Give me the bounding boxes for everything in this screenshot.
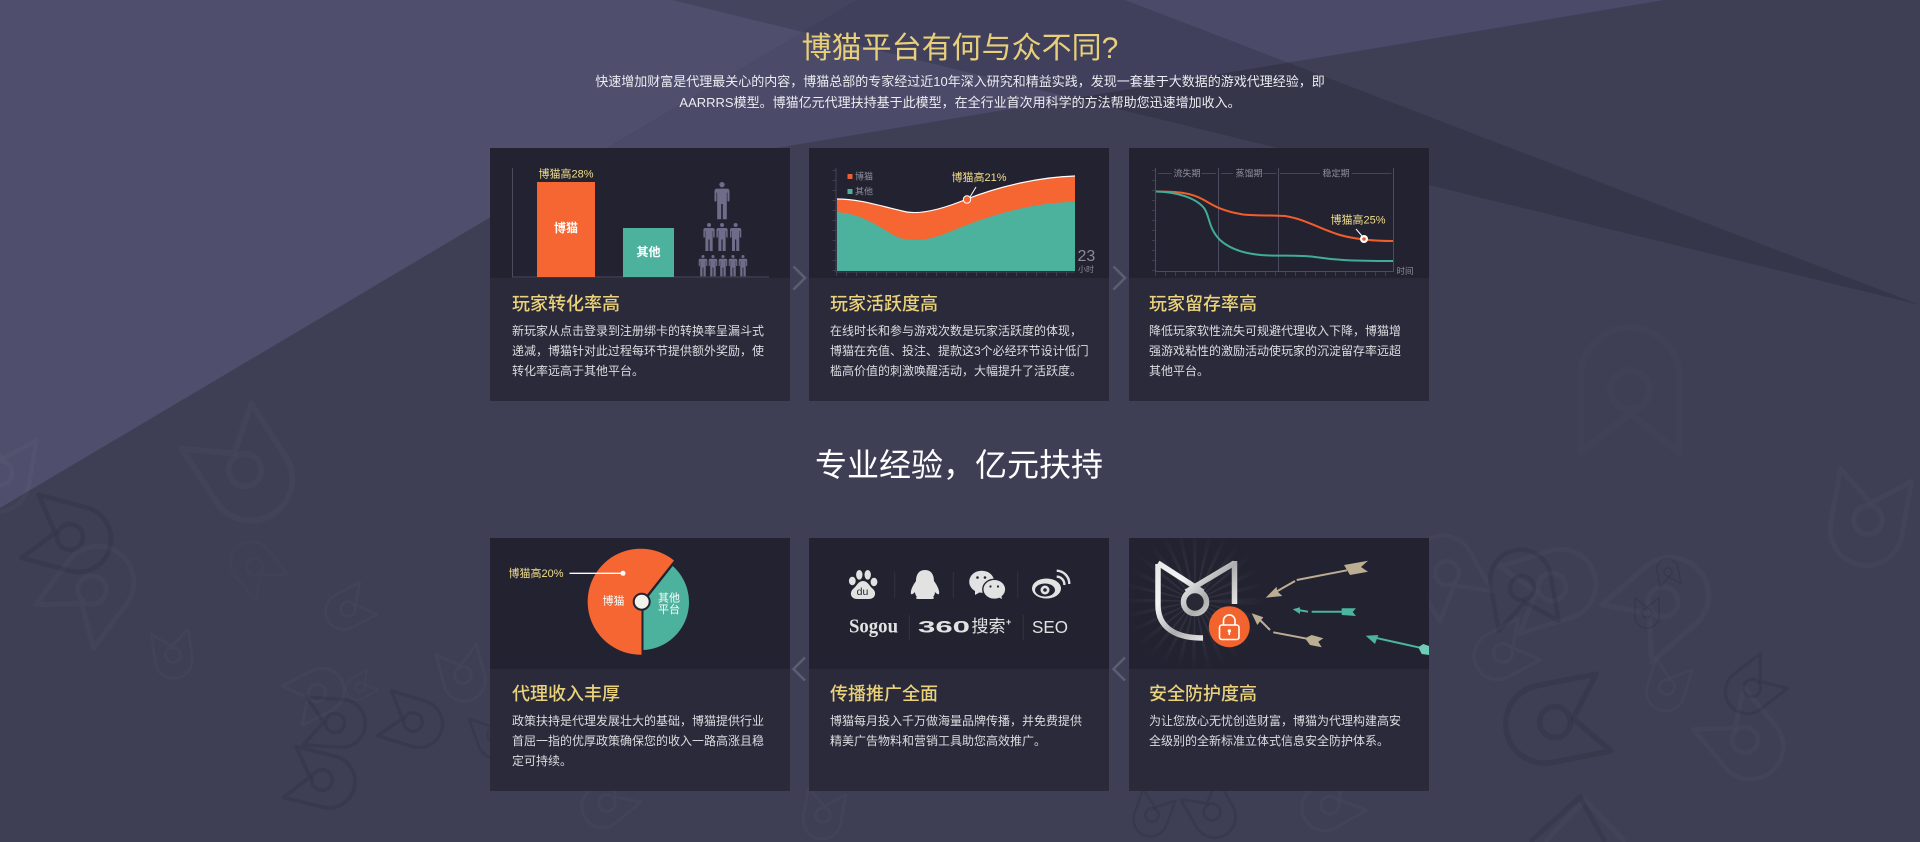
description: 全级别的全新标准立体式信息安全防护体系。 (1149, 734, 1389, 748)
heading: 玩家转化率高 (512, 294, 620, 314)
panel: security (1129, 538, 1429, 791)
heading: 玩家活跃度高 (830, 294, 938, 314)
area chart (809, 148, 1109, 278)
line chart: 蒸馏期 (1235, 168, 1263, 178)
logo: seo: SEO (1032, 617, 1068, 637)
arrow: left chevron 2 (1112, 656, 1126, 682)
description: 递减，博猫针对此过程每环节提供额外奖励，使 (512, 344, 764, 358)
icon: tan arrow top (1266, 561, 1368, 598)
logo: 360 search: 360 (918, 618, 970, 636)
description: 政策扶持是代理发展壮大的基础，博猫提供行业 (512, 714, 764, 728)
line chart (1129, 148, 1429, 278)
intro text (595, 74, 1325, 110)
area chart: 小时 (1078, 264, 1094, 274)
description: 为让您放心无忧创造财富，博猫为代理构建高安 (1149, 714, 1401, 728)
heading: 代理收入丰厚 (512, 684, 620, 704)
bar chart with people funnel (490, 148, 790, 278)
description: 新玩家从点击登录到注册绑卡的转换率呈漏斗式 (512, 324, 764, 338)
description (512, 714, 764, 768)
area chart: 23 (1078, 248, 1095, 265)
heading: 传播推广全面 (830, 684, 938, 704)
icon: tan arrow bottom (1252, 613, 1323, 647)
logo: 360 search: + (1006, 617, 1011, 627)
icon: lock badge (1209, 606, 1250, 647)
description: 在线时长和参与游戏次数是玩家活跃度的体现， (830, 324, 1082, 338)
description: 博猫每月投入千万做海量品牌传播，并免费提供 (830, 714, 1082, 728)
panel: player activity (809, 148, 1109, 401)
area chart: 博猫 (855, 170, 873, 182)
area chart: 博猫高21% (951, 170, 1007, 184)
heading: 安全防护度高 (1149, 684, 1257, 704)
icon: silver shield logo (1158, 561, 1234, 638)
icon: wechat bubbles (969, 571, 1006, 599)
description: 槛高价值的刺激唤醒活动，大幅提升了活跃度。 (830, 364, 1082, 378)
pie chart (490, 538, 790, 669)
icon: weibo (1032, 571, 1069, 598)
icon: baidu paw (849, 570, 877, 599)
arrow: right chevron 1 (792, 266, 806, 290)
arrow: right chevron 2 (1112, 266, 1126, 290)
pie chart: 平台 (658, 602, 680, 616)
bar chart with people funnel: 博猫高28% (538, 166, 594, 180)
description: 首屈一指的优厚政策确保您的收入一路高涨且稳 (512, 734, 764, 748)
line chart: 稳定期 (1322, 168, 1350, 178)
description: 降低玩家软性流失可规避代理收入下降，博猫增 (1149, 324, 1401, 338)
illustration: shield logo, lock and arrows (1129, 538, 1429, 669)
icons: media channels (809, 538, 1109, 669)
description (830, 324, 1089, 378)
description: 博猫在充值、投注、提款这3个必经环节设计低门 (830, 344, 1089, 358)
panel: promotion (809, 538, 1109, 791)
icon: teal arrow right (1366, 635, 1429, 655)
icon: baidu paw: du (857, 586, 868, 598)
pie chart: 博猫高20% (508, 566, 564, 580)
pie chart: 博猫 (602, 594, 624, 608)
description: 转化率远高于其他平台。 (512, 364, 644, 378)
logo: sogou: Sogou (849, 616, 898, 638)
line chart: 博猫高25% (1330, 212, 1386, 226)
description: 定可持续。 (512, 754, 572, 768)
arrow: left chevron 1 (792, 656, 806, 682)
logo: 360 search: 搜索 (972, 617, 1006, 636)
panel: agent income (490, 538, 790, 791)
description: 强游戏粘性的激励活动使玩家的沉淀留存率远超 (1149, 344, 1401, 358)
intro text: 快速增加财富是代理最关心的内容，博猫总部的专家经过近10年深入研究和精益实践，发现一套基于大数据的游戏代理经验，即 (595, 74, 1325, 89)
panel: player conversion (490, 148, 790, 401)
description (830, 714, 1082, 748)
description (512, 324, 764, 378)
description (1149, 714, 1401, 748)
pie chart: 其他 (658, 592, 680, 604)
line chart: 流失期 (1173, 168, 1201, 178)
bar chart with people funnel: 其他 (636, 244, 661, 259)
icon: qq penguin (911, 570, 939, 599)
panel: player retention (1129, 148, 1429, 401)
line chart: 时间 (1396, 266, 1414, 276)
description: 其他平台。 (1149, 364, 1209, 378)
title: 博猫平台有何与众不同? (802, 32, 1118, 65)
area chart: 其他 (855, 186, 873, 196)
description: 精美广告物料和营销工具助您高效推广。 (830, 734, 1046, 748)
section heading: 专业经验，亿元扶持 (815, 447, 1103, 483)
heading: 玩家留存率高 (1149, 294, 1257, 314)
bar chart with people funnel: 博猫 (554, 220, 578, 235)
intro text: AARRRS模型。博猫亿元代理扶持基于此模型，在全行业首次用科学的方法帮助您迅速增加收入。 (679, 94, 1241, 110)
icon: teal arrow middle (1293, 607, 1356, 616)
description (1149, 324, 1401, 378)
logo: 360 search (918, 617, 1011, 636)
